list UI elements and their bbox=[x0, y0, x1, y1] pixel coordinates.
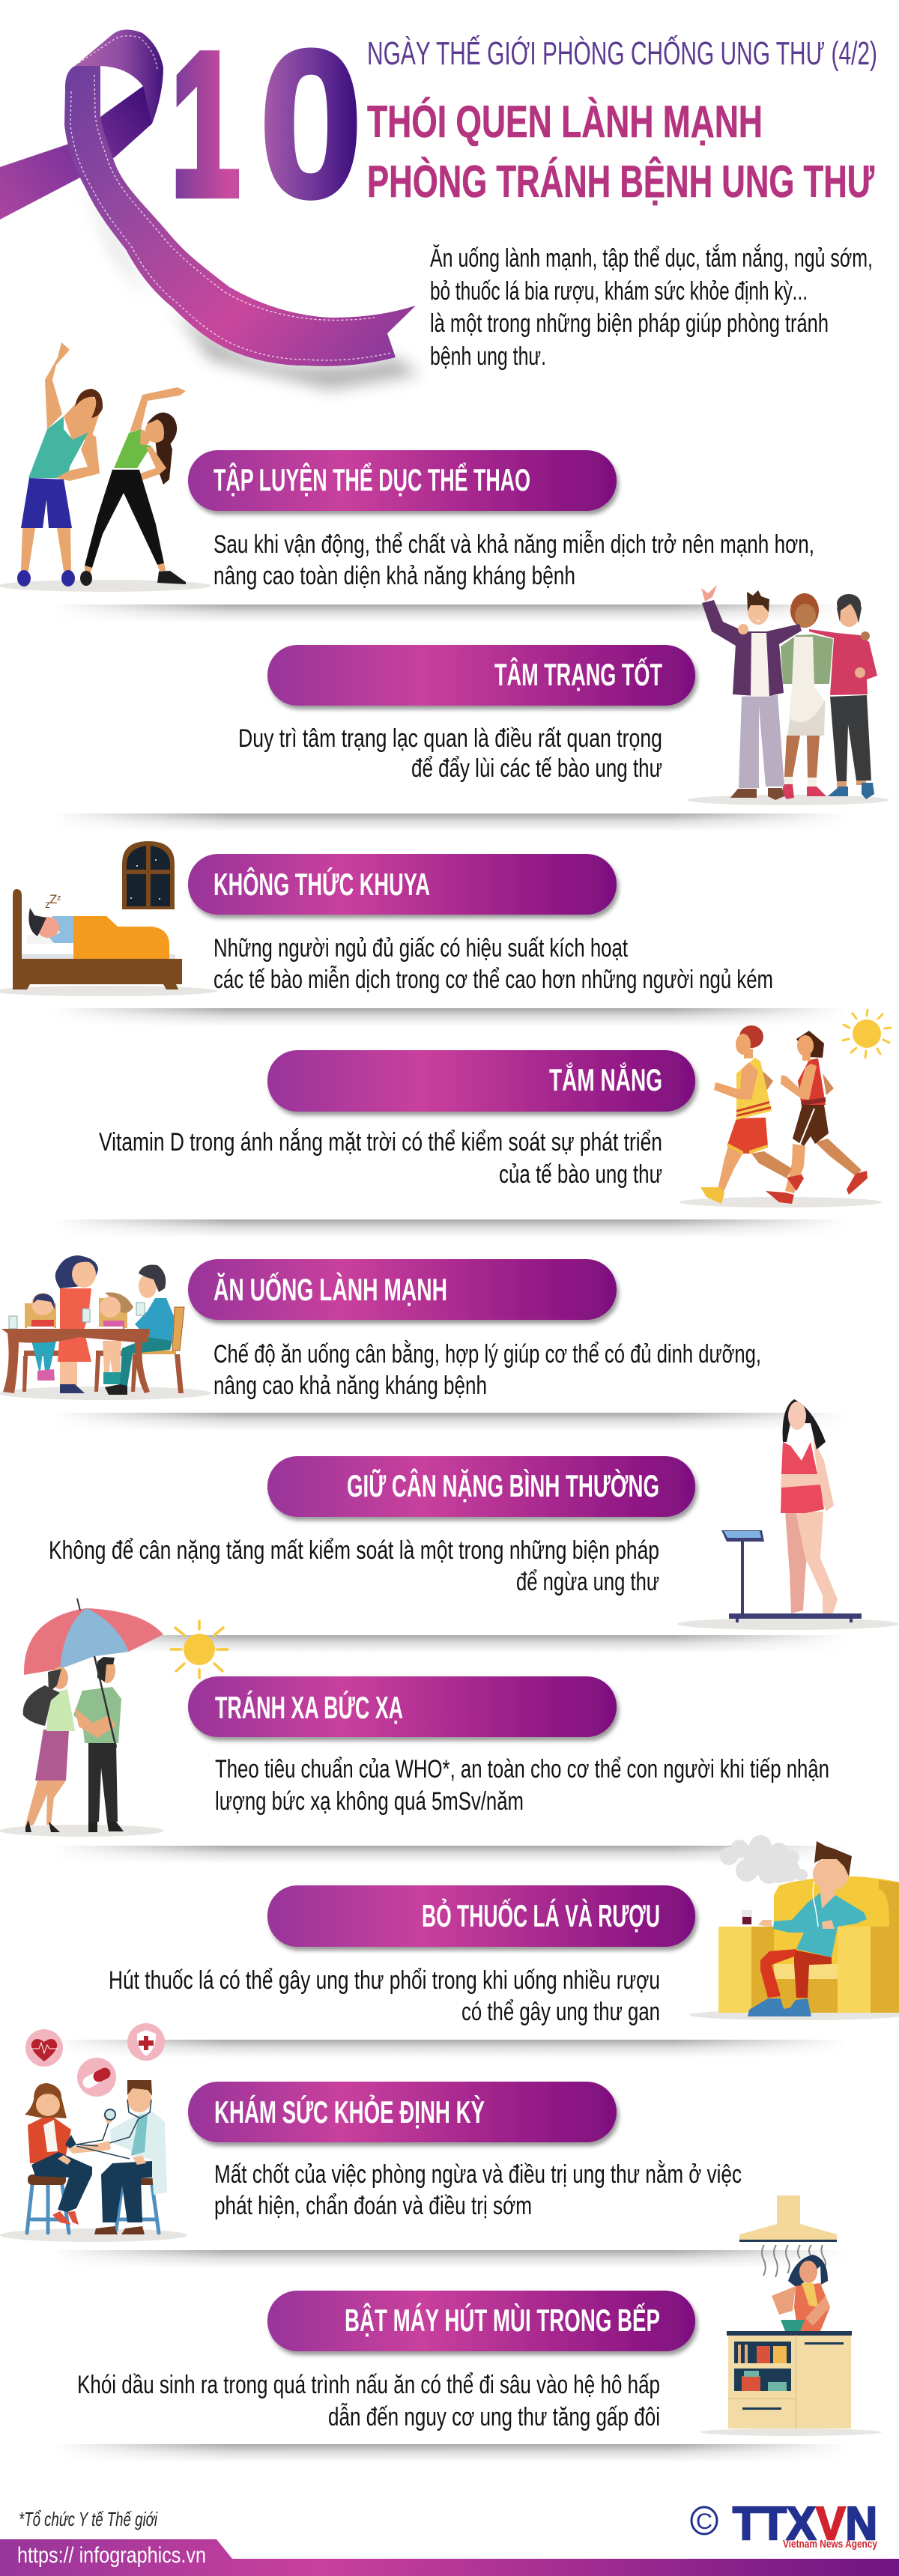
heading: healthy eating: ĂN UỐNG LÀNH MẠNH bbox=[214, 1271, 447, 1307]
pill: kitchen hood bbox=[267, 2291, 695, 2351]
heading: quit tobacco and alcohol: BỎ THUỐC LÁ VÀ RƯỢU bbox=[422, 1897, 660, 1933]
pill: avoid radiation bbox=[188, 1676, 617, 1737]
illustration: sleeping man and night window: z bbox=[57, 894, 61, 903]
title: main heading bbox=[367, 97, 874, 207]
text: health check: phát hiện, chẩn đoán và điều trị sớm bbox=[214, 2192, 532, 2220]
panel: kitchen hood bbox=[77, 2195, 882, 2436]
text: normal weight: Không để cân nặng tăng mất kiểm soát là một trong những biện pháp bbox=[49, 1536, 659, 1565]
patient stool bbox=[27, 2175, 69, 2233]
heading: good mood: TÂM TRẠNG TỐT bbox=[494, 656, 662, 692]
logo wordmark: TTXVN bbox=[733, 2498, 877, 2550]
footnote: *Tổ chức Y tế Thế giới bbox=[19, 2508, 158, 2530]
text: exercise bbox=[214, 530, 814, 590]
panel: no staying up late bbox=[0, 841, 773, 996]
pill: sunbathing bbox=[267, 1050, 695, 1112]
panel: health check bbox=[0, 2023, 742, 2242]
text: health check bbox=[214, 2160, 742, 2220]
illustration: couple under umbrella with sun bbox=[0, 1598, 228, 1837]
text: health check: Mất chốt của việc phòng ngừa và điều trị ung thư nằm ở việc bbox=[214, 2160, 742, 2189]
text: sunbathing: Vitamin D trong ánh nắng mặt trời có thể kiểm soát sự phát triển bbox=[99, 1128, 662, 1157]
icon: pill capsule bbox=[77, 2058, 116, 2097]
pill: healthy eating bbox=[188, 1259, 617, 1320]
pill: health check bbox=[188, 2082, 617, 2142]
heading: sunbathing: TẮM NẮNG bbox=[549, 1061, 662, 1097]
text: quit tobacco and alcohol: Hút thuốc lá có thể gây ung thư phổi trong khi uống nhiều rượu bbox=[109, 1966, 660, 1995]
pill: normal weight bbox=[267, 1456, 695, 1517]
heading: health check: KHÁM SỨC KHỎE ĐỊNH KỲ bbox=[214, 2094, 485, 2130]
text: quit tobacco and alcohol bbox=[109, 1966, 660, 2026]
footer url: https:// infographics.vn bbox=[17, 2543, 206, 2568]
text: no staying up late bbox=[214, 934, 773, 994]
text: normal weight: để ngừa ung thư bbox=[516, 1568, 659, 1596]
footer band bbox=[0, 2539, 899, 2576]
logo tagline: Vietnam News Agency bbox=[783, 2538, 878, 2551]
heading: normal weight: GIỮ CÂN NẶNG BÌNH THƯỜNG bbox=[347, 1467, 659, 1503]
pill: exercise bbox=[188, 450, 617, 511]
panel: avoid radiation bbox=[0, 1598, 829, 1837]
big number 10: 1 bbox=[171, 12, 240, 237]
illustration: sleeping man and night window bbox=[0, 841, 217, 996]
icon: shield cross bbox=[127, 2023, 165, 2061]
illustration: woman cooking under hood bbox=[700, 2195, 882, 2436]
text: sunbathing bbox=[99, 1128, 662, 1189]
logo: TTXVN bbox=[691, 2498, 878, 2551]
illustration: three friends bbox=[687, 585, 889, 805]
text: kitchen hood bbox=[77, 2371, 660, 2431]
text: normal weight bbox=[49, 1536, 659, 1596]
text: kitchen hood: Khói dầu sinh ra trong quá trình nấu ăn có thể đi sâu vào hệ hô hấp bbox=[77, 2371, 660, 2399]
copyright symbol: C bbox=[696, 2509, 712, 2534]
copyright symbol bbox=[691, 2507, 717, 2534]
text: healthy eating bbox=[214, 1340, 761, 1400]
illustration: couple stretching bbox=[0, 342, 211, 592]
illustration: woman on scale bbox=[677, 1399, 899, 1630]
pill: good mood bbox=[267, 645, 695, 706]
doctor stool bbox=[116, 2178, 159, 2233]
patient bbox=[25, 2083, 110, 2225]
text: sunbathing: của tế bào ung thư bbox=[499, 1160, 662, 1189]
intro text bbox=[430, 244, 873, 371]
panel: sunbathing bbox=[99, 1010, 891, 1207]
heading: avoid radiation: TRÁNH XA BỨC XẠ bbox=[215, 1689, 403, 1725]
big number 10: 0 bbox=[259, 7, 363, 241]
heading: no staying up late: KHÔNG THỨC KHUYA bbox=[214, 866, 430, 902]
text: good mood bbox=[238, 724, 662, 783]
panel: good mood bbox=[238, 585, 889, 805]
pill: no staying up late bbox=[188, 854, 617, 915]
illustration: man smoking in armchair bbox=[689, 1835, 899, 2020]
text: avoid radiation bbox=[215, 1755, 829, 1816]
icon: heart bbox=[25, 2029, 63, 2067]
panel: healthy eating bbox=[0, 1255, 761, 1400]
text: kitchen hood: dẫn đến nguy cơ ung thư tăng gấp đôi bbox=[328, 2403, 660, 2431]
panel: exercise bbox=[0, 342, 814, 592]
intro text: bệnh ung thư. bbox=[430, 342, 546, 371]
text: good mood: để đẩy lùi các tế bào ung thư bbox=[411, 754, 662, 783]
illustration: family at table bbox=[0, 1255, 211, 1400]
panel: normal weight bbox=[49, 1399, 899, 1630]
panel: quit tobacco and alcohol bbox=[109, 1835, 899, 2026]
heading: kitchen hood: BẬT MÁY HÚT MÙI TRONG BẾP bbox=[345, 2302, 660, 2338]
woman runner bbox=[766, 1031, 868, 1204]
icon: purple awareness ribbon bbox=[0, 29, 420, 390]
armchair bbox=[718, 1876, 899, 2013]
pill: quit tobacco and alcohol bbox=[267, 1885, 695, 1947]
text: exercise: nâng cao toàn diện khả năng kháng bệnh bbox=[214, 562, 575, 590]
text: quit tobacco and alcohol: có thể gây ung thư gan bbox=[461, 1998, 660, 2026]
doctor bbox=[76, 2080, 167, 2234]
icon: sun bbox=[171, 1621, 228, 1678]
man runner bbox=[700, 1025, 804, 1204]
icon: sun bbox=[843, 1010, 891, 1058]
heading: exercise: TẬP LUYỆN THỂ DỤC THỂ THAO bbox=[214, 461, 530, 497]
illustration: sleeping man and night window: Z bbox=[49, 892, 57, 906]
title: main heading: THÓI QUEN LÀNH MẠNH bbox=[367, 97, 763, 147]
smoke cloud bbox=[720, 1835, 808, 1884]
illustration: doctor and patient bbox=[0, 2023, 187, 2242]
text: avoid radiation: lượng bức xạ không quá 5mSv/năm bbox=[215, 1787, 524, 1816]
big number 10 bbox=[171, 7, 363, 241]
illustration: two runners and sun bbox=[679, 1010, 891, 1207]
illustration: sleeping man and night window: z bbox=[45, 898, 50, 910]
text: no staying up late: Những người ngủ đủ giấc có hiệu suất kích hoạt bbox=[214, 934, 628, 963]
text: healthy eating: nâng cao khả năng kháng bệnh bbox=[214, 1372, 487, 1400]
text: good mood: Duy trì tâm trạng lạc quan là điều rất quan trọng bbox=[238, 724, 662, 753]
